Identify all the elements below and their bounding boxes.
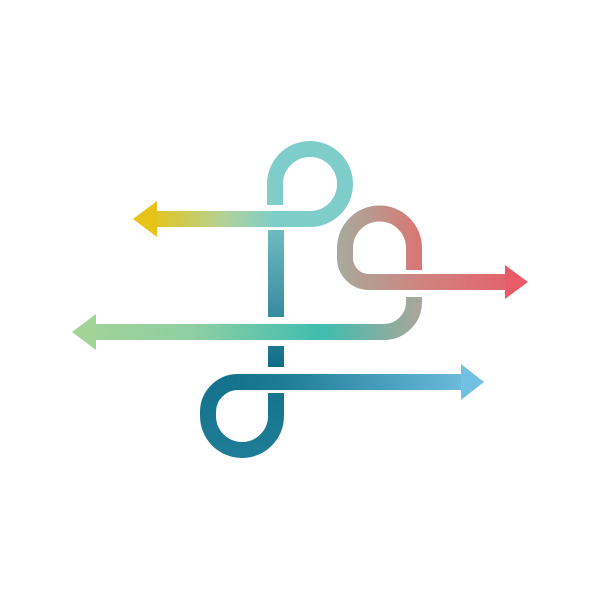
path: red arrow with loop: [345, 214, 528, 299]
path: green arrow: [72, 297, 414, 350]
path: teal vertical: [268, 230, 284, 367]
path: yellow arrow with teal loop: [133, 149, 345, 237]
path: blue arrow with bottom loop: [208, 364, 484, 450]
